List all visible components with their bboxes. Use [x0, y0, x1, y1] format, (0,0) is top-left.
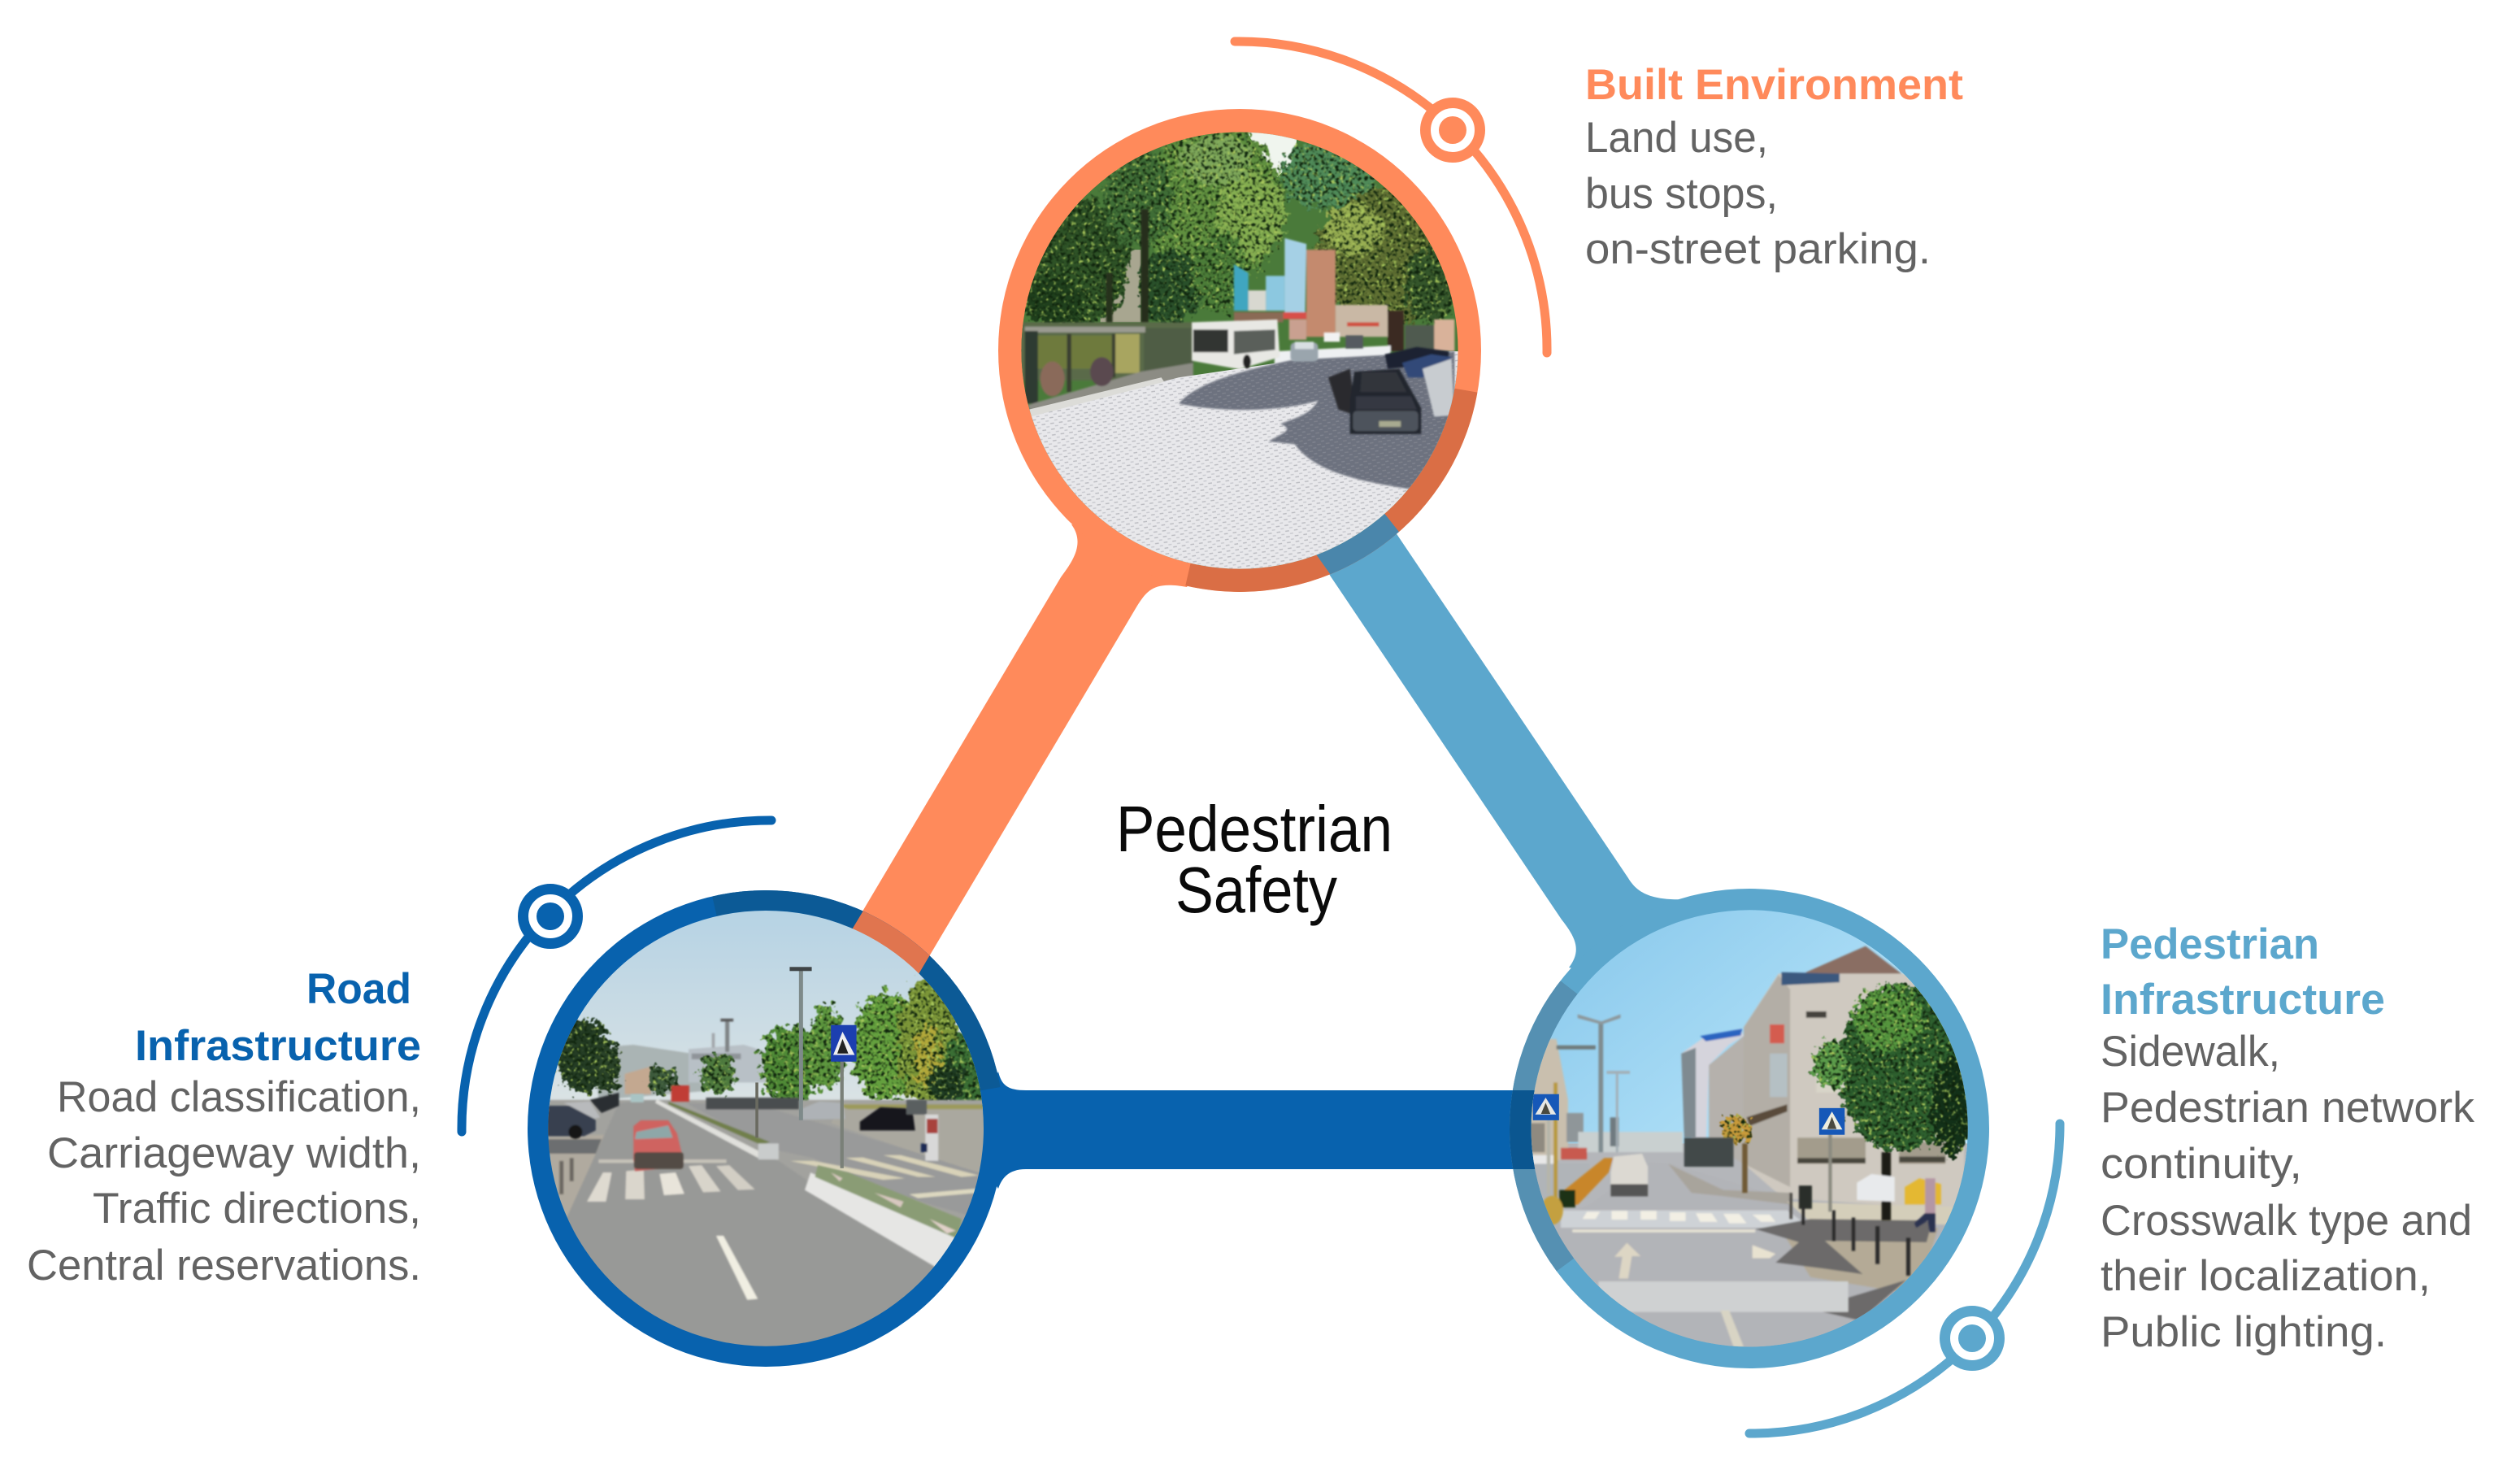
- title: pedestrian safety: Pedestrian: [1116, 793, 1393, 865]
- icon: crossing signs: [1533, 1094, 1844, 1135]
- ring: road infrastructure: [528, 890, 1000, 1367]
- text block: pedestrian infrastructure: Crosswalk type and: [2101, 1197, 2472, 1245]
- icon: lamp post and crossing sign: [755, 967, 857, 1168]
- photo: road with central reservation and crosswalk: [541, 902, 996, 1358]
- text block: road infrastructure: [27, 965, 421, 1290]
- title: pedestrian safety: Safety: [1175, 854, 1337, 926]
- text block: pedestrian infrastructure: Infrastructure: [2101, 976, 2385, 1024]
- text block: pedestrian infrastructure: Pedestrian: [2101, 920, 2319, 968]
- text block: built environment: Land use,: [1585, 114, 1768, 162]
- ring: built environment: [998, 109, 1481, 592]
- left side: buildings, poles and distance: [1520, 1014, 1733, 1198]
- arm: dark blue connector, road infrastructure to pedestrian infrastructure: [967, 1072, 1545, 1189]
- foliage: trees: [554, 975, 993, 1109]
- photo: urban street with sidewalk and building: [1520, 902, 1975, 1358]
- photo: street with bus stop and cobblestones: [1016, 122, 1471, 577]
- arm: light blue connector, built environment to pedestrian infrastructure: [1310, 500, 1699, 976]
- text block: pedestrian infrastructure: their localization,: [2101, 1252, 2431, 1300]
- text block: road infrastructure: Carriageway width,: [47, 1129, 421, 1177]
- building: corner block: [1681, 946, 1975, 1211]
- ring: pedestrian infrastructure: [1463, 889, 1989, 1368]
- vehicles, street furniture and pedestrian: [1541, 1119, 1941, 1276]
- road: cobblestones with tree shadow: [1016, 351, 1471, 577]
- arc with target marker: pedestrian infrastructure: [1749, 1124, 2060, 1433]
- text block: pedestrian infrastructure: Pedestrian network: [2101, 1084, 2475, 1132]
- text block: built environment: on-street parking.: [1585, 225, 1931, 273]
- text block: pedestrian infrastructure: Public lighting.: [2101, 1308, 2387, 1356]
- planter: central reservation with flowers: [805, 1165, 962, 1268]
- text block: road infrastructure: Road: [306, 965, 411, 1013]
- text block: built environment: [1585, 61, 1963, 273]
- building: behind the trees on the left: [1101, 250, 1141, 322]
- arc with target marker: built environment: [1235, 41, 1547, 353]
- text block: road infrastructure: Road classification,: [57, 1073, 421, 1121]
- text block: pedestrian infrastructure: continuity,: [2101, 1140, 2302, 1188]
- foliage: trees: [1019, 125, 1458, 328]
- road surface: carriageways, median and pavement: [541, 1099, 996, 1358]
- text block: pedestrian infrastructure: [2101, 920, 2475, 1356]
- text block: built environment: bus stops,: [1585, 170, 1778, 218]
- text block: built environment: Built Environment: [1585, 61, 1963, 109]
- arm: orange connector, built environment to road infrastructure: [829, 524, 1219, 988]
- vehicles: red car and parked cars: [541, 1085, 938, 1171]
- road surface: carriageway, crosswalk and sidewalk: [1551, 1164, 1953, 1346]
- arc with target marker: road infrastructure: [462, 820, 771, 1132]
- title: pedestrian safety: [1116, 793, 1393, 926]
- vehicles: bus and parked cars: [1192, 320, 1454, 434]
- text block: pedestrian infrastructure: Sidewalk,: [2101, 1028, 2280, 1076]
- text block: road infrastructure: Central reservations.: [27, 1242, 421, 1290]
- foliage: trees: [1721, 984, 1973, 1158]
- text block: road infrastructure: Traffic directions,: [93, 1185, 421, 1233]
- text block: road infrastructure: Infrastructure: [135, 1022, 421, 1070]
